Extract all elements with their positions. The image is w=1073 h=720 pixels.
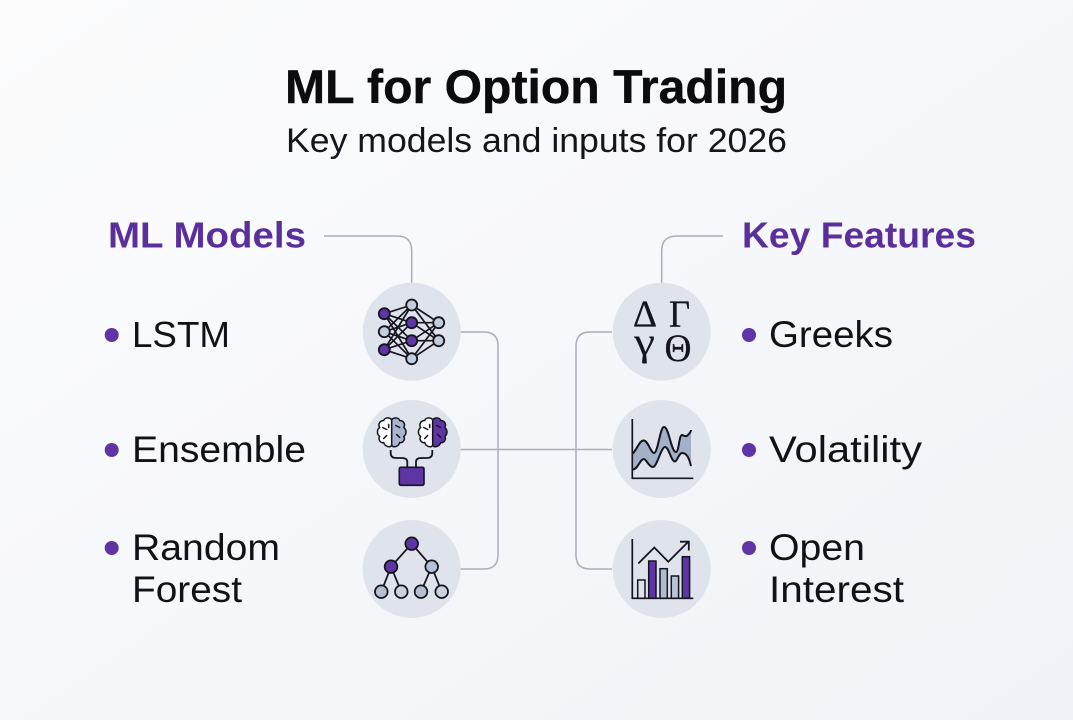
item: Random Forest xyxy=(105,527,280,610)
icon: neural network xyxy=(363,283,461,381)
icon: Greek letters: Γ xyxy=(669,294,690,336)
connector lines xyxy=(324,236,723,569)
item: Open Interest: Open xyxy=(769,527,865,568)
icon: open interest bars xyxy=(613,520,711,618)
icon: volatility chart xyxy=(613,400,711,498)
icon: Greek letters: γ xyxy=(633,319,655,364)
item: Volatility: Volatility xyxy=(769,429,923,470)
title: ML for Option Trading xyxy=(285,60,787,113)
icon: decision tree xyxy=(363,520,461,618)
item: LSTM: LSTM xyxy=(132,314,230,355)
heading: Key Features: Key Features xyxy=(742,214,976,256)
item: Open Interest xyxy=(742,527,905,610)
item: Ensemble: Ensemble xyxy=(132,429,306,470)
icon: Greek letters: Θ xyxy=(664,327,692,370)
icon: ensemble brains xyxy=(363,400,461,498)
list: key features xyxy=(742,314,923,610)
list: ML models xyxy=(105,314,306,610)
subtitle: Key models and inputs for 2026 xyxy=(286,122,787,160)
heading: ML Models: ML Models xyxy=(108,214,306,256)
item: Greeks: Greeks xyxy=(769,314,893,355)
icon: Greek letters: Δ xyxy=(633,294,657,336)
item: Open Interest: Interest xyxy=(769,569,905,610)
icon: Greek letters xyxy=(613,283,711,381)
item: Random Forest: Forest xyxy=(132,569,243,610)
item: Random Forest: Random xyxy=(132,527,280,568)
